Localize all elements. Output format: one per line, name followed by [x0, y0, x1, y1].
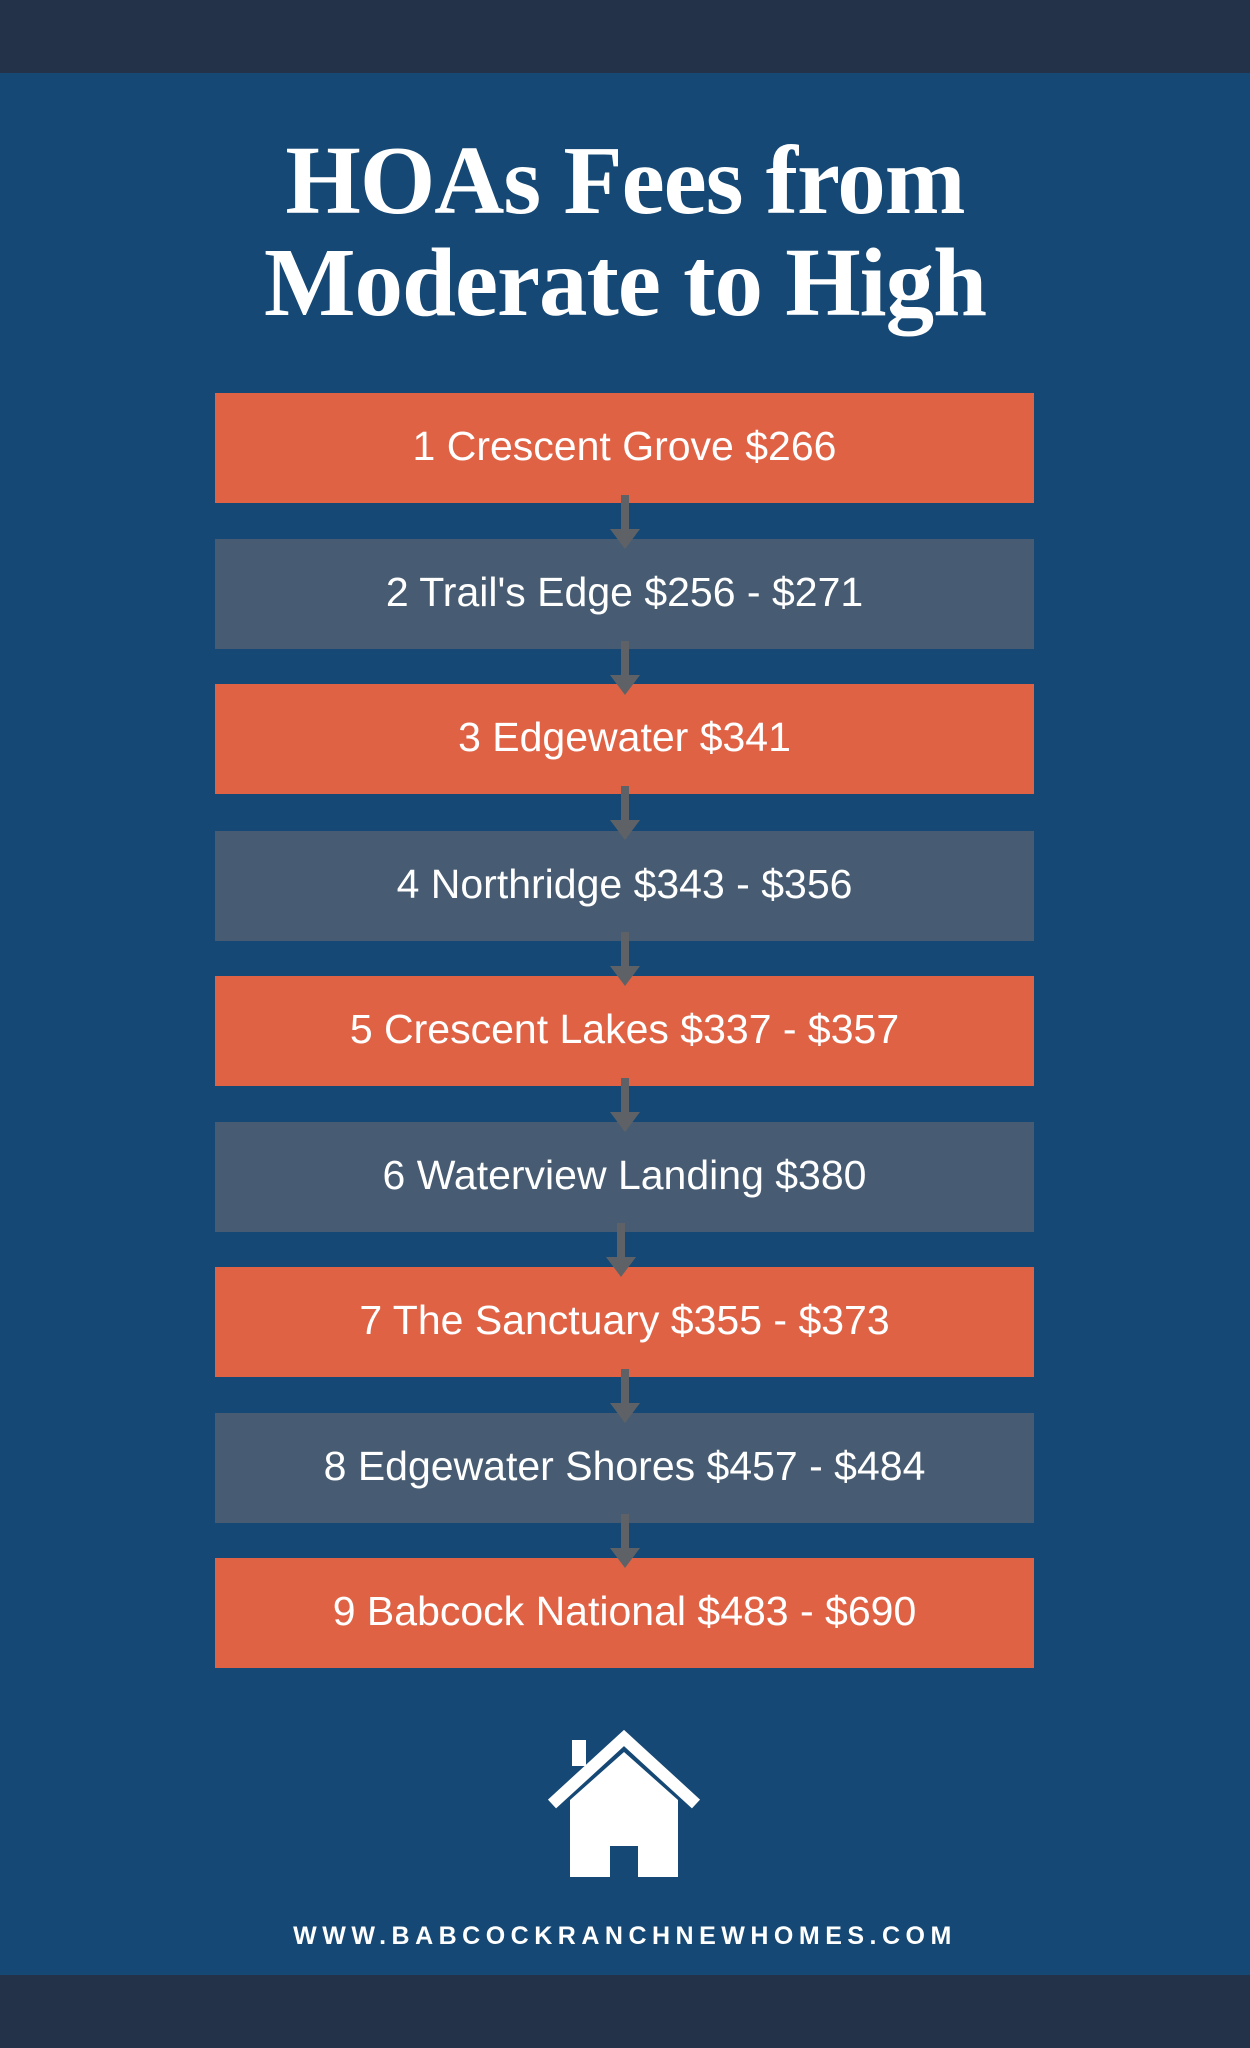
step 6 [215, 1122, 1034, 1232]
step 5 [215, 976, 1034, 1086]
step 1: 1 Crescent Grove $266 [413, 422, 836, 468]
step 8: 8 Edgewater Shores $457 - $484 [324, 1442, 925, 1488]
step 8 [215, 1413, 1034, 1523]
step 3: 3 Edgewater $341 [458, 714, 791, 760]
step 9 [215, 1558, 1034, 1668]
step 7: 7 The Sanctuary $355 - $373 [359, 1296, 890, 1342]
step 4: 4 Northridge $343 - $356 [397, 860, 852, 906]
step 9: 9 Babcock National $483 - $690 [333, 1588, 916, 1634]
title: HOAs Fees from [285, 127, 965, 234]
footer url: WWW.BABCOCKRANCHNEWHOMES.COM [293, 1922, 957, 1950]
title: Moderate to High [264, 229, 986, 336]
step 5: 5 Crescent Lakes $337 - $357 [350, 1006, 899, 1052]
step 7 [215, 1267, 1034, 1377]
step 1 [215, 393, 1034, 503]
step 3 [215, 684, 1034, 794]
arrows [606, 495, 640, 1568]
step 6: 6 Waterview Landing $380 [383, 1152, 866, 1198]
step 2 [215, 539, 1034, 649]
step 2: 2 Trail's Edge $256 - $271 [386, 568, 863, 614]
icon: house [548, 1730, 700, 1877]
step 4 [215, 831, 1034, 941]
title [264, 127, 986, 336]
